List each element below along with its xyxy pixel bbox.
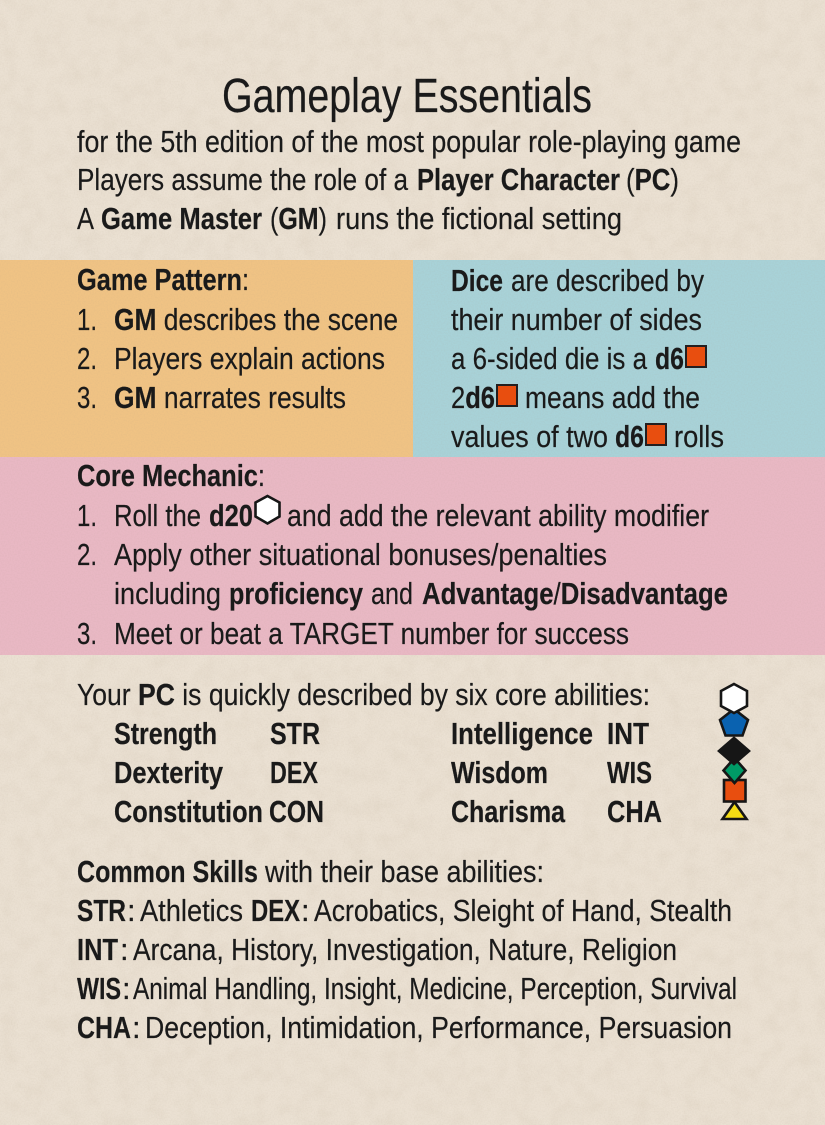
- core mechanic text: 1.: [77, 498, 97, 533]
- common skills text block: STR: [77, 893, 126, 928]
- common skills text block: :: [120, 932, 129, 967]
- abilities text block: Wisdom: [451, 755, 548, 790]
- abilities text block: Constitution: [114, 794, 263, 829]
- common skills text block: Acrobatics, Sleight of Hand, Stealth: [314, 893, 732, 928]
- dice text: are described by: [511, 263, 704, 298]
- icon: d6 square: [646, 424, 666, 445]
- common skills text block: :: [132, 1010, 141, 1045]
- common skills text block: Athletics: [140, 893, 243, 928]
- common skills text block: WIS: [77, 971, 121, 1006]
- dice text: a 6-sided die is a: [451, 341, 648, 376]
- dice text: 2d6: [451, 380, 495, 415]
- intro text block: runs the fictional setting: [336, 201, 622, 236]
- dice text: values of two: [451, 419, 608, 454]
- abilities text block: Charisma: [451, 794, 566, 829]
- panel: game pattern background: [0, 260, 413, 457]
- game pattern text: 3.: [77, 380, 97, 415]
- panel: dice background: [413, 260, 825, 457]
- dice text: d6: [615, 419, 644, 454]
- core mechanic text: Meet or beat a TARGET number for success: [114, 616, 629, 651]
- core mechanic text: 2.: [77, 537, 97, 572]
- abilities text block: Intelligence: [451, 716, 593, 751]
- core mechanic text: Advantage/Disadvantage: [422, 576, 728, 611]
- abilities text block: CHA: [607, 794, 662, 829]
- common skills text block: with their base abilities:: [264, 854, 544, 889]
- game pattern text: GM describes the scene: [114, 302, 398, 337]
- abilities text block: [77, 677, 662, 829]
- common skills text block: INT: [77, 932, 118, 967]
- abilities text block: Your PC is quickly described by six core abilities:: [77, 677, 650, 712]
- common skills text block: [77, 854, 737, 1045]
- dice text: d6: [655, 341, 684, 376]
- title: Gameplay Essentials: [222, 70, 592, 123]
- dice text: [451, 263, 724, 454]
- common skills text block: :: [301, 893, 310, 928]
- icon: stack of dice shapes: [719, 684, 749, 819]
- dice text: their number of sides: [451, 302, 702, 337]
- intro text block: Player Character: [417, 162, 620, 197]
- core mechanic text: [77, 458, 728, 651]
- core mechanic text: Core Mechanic:: [77, 458, 265, 493]
- abilities text block: WIS: [607, 755, 652, 790]
- icon: d6 square: [497, 385, 517, 406]
- core mechanic text: and: [371, 576, 413, 611]
- core mechanic text: 3.: [77, 616, 97, 651]
- abilities text block: DEX: [270, 755, 318, 790]
- game pattern text: 2.: [77, 341, 97, 376]
- common skills text block: :: [122, 971, 131, 1006]
- dice text: Dice: [451, 263, 503, 298]
- game pattern text: 1.: [77, 302, 97, 337]
- game pattern text: Game Pattern:: [77, 262, 249, 297]
- core mechanic text: Roll the: [114, 498, 201, 533]
- intro text block: [77, 124, 741, 236]
- dice text: means add the: [525, 380, 700, 415]
- common skills text block: :: [127, 893, 136, 928]
- icon: d6 square: [686, 346, 706, 367]
- abilities text block: STR: [270, 716, 320, 751]
- common skills text block: Arcana, History, Investigation, Nature, Religion: [133, 932, 677, 967]
- panel: core mechanic background: [0, 457, 825, 655]
- intro text block: for the 5th edition of the most popular role-playing game: [77, 124, 741, 159]
- intro text block: (PC): [626, 162, 679, 197]
- core mechanic text: and add the relevant ability modifier: [287, 498, 709, 533]
- dice text: rolls: [674, 419, 724, 454]
- core mechanic text: d20: [209, 498, 253, 533]
- intro text block: Players assume the role of a: [77, 162, 409, 197]
- intro text block: A: [77, 201, 94, 236]
- abilities text block: INT: [607, 716, 649, 751]
- intro text block: (GM): [270, 201, 327, 236]
- abilities text block: Dexterity: [114, 755, 224, 790]
- common skills text block: DEX: [251, 893, 300, 928]
- core mechanic text: proficiency: [229, 576, 364, 611]
- common skills text block: Deception, Intimidation, Performance, Persuasion: [145, 1010, 732, 1045]
- icon: d20 hexagon: [256, 496, 280, 524]
- game pattern text: [77, 262, 398, 415]
- intro text block: Game Master: [101, 201, 262, 236]
- game pattern text: Players explain actions: [114, 341, 385, 376]
- core mechanic text: including: [114, 576, 221, 611]
- common skills text block: CHA: [77, 1010, 131, 1045]
- common skills text block: Common Skills: [77, 854, 258, 889]
- core mechanic text: Apply other situational bonuses/penalties: [114, 537, 607, 572]
- abilities text block: Strength: [114, 716, 217, 751]
- abilities text block: CON: [269, 794, 324, 829]
- game pattern text: GM narrates results: [114, 380, 346, 415]
